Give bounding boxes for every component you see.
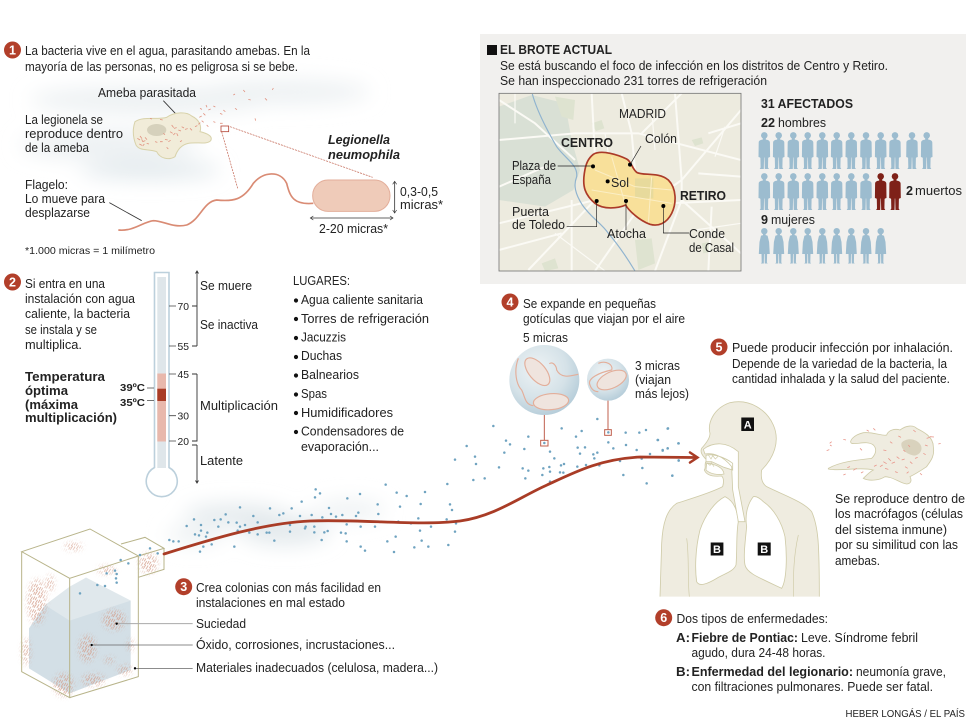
optimal temperature text (25, 370, 117, 425)
map labels: RETIRO (680, 189, 726, 203)
list: lugares: evaporación... (301, 440, 379, 454)
panel intro: Se han inspeccionado 231 torres de refrigeración (500, 74, 767, 88)
illustration: macrophage (827, 426, 941, 484)
label: flagelo: Flagelo: (25, 178, 68, 192)
label: 22 hombres: 22 (761, 116, 775, 130)
macrophage text: los macrófagos (células (835, 507, 963, 521)
label: la legionela se reproduce: de la ameba (25, 141, 89, 155)
step 4 text (523, 297, 685, 326)
step 4 text: Se expande en pequeñas (523, 297, 656, 311)
step 5: inhalation (660, 338, 965, 597)
pictogram: men row 2 (758, 173, 872, 210)
step 1 text (25, 44, 310, 74)
optimal range labels (120, 382, 145, 409)
badge 2: 2 (9, 276, 16, 290)
callouts: causes: Materiales inadecuados (celulosa, madera...) (196, 661, 438, 675)
callouts: causes: Suciedad (196, 617, 246, 631)
disease A (676, 631, 918, 660)
callouts: causes (196, 617, 438, 675)
badge 3 (175, 578, 192, 595)
thermometer (146, 271, 198, 497)
label: Legionella neumophila (328, 133, 400, 162)
haze: aerosol cloud (167, 501, 385, 545)
label: height: 0,3-0,5 (400, 185, 438, 199)
list: lugares: Agua caliente sanitaria (301, 293, 423, 307)
affected counts (758, 97, 962, 264)
label: 9 mujeres: mujeres (771, 213, 815, 227)
thermometer ranges (200, 279, 278, 468)
arrow: infection route (164, 452, 698, 554)
step 3 text: instalaciones en mal estado (196, 596, 345, 610)
thermometer ranges: Se inactiva (200, 318, 258, 332)
macrophage text: amebas. (835, 554, 880, 568)
badge 5 (710, 338, 728, 356)
map labels: de Toledo (512, 218, 565, 232)
label: length: 2-20 micras* (319, 222, 388, 236)
label: flagelo: Lo mueve para (25, 192, 105, 206)
disease B: con filtraciones pulmonares. Puede ser fatal. (692, 680, 933, 694)
step 2 text: instalación con agua (25, 292, 135, 306)
badge 1: 1 (9, 44, 16, 58)
badge 6 (655, 609, 672, 626)
illustration: tank (18, 528, 193, 700)
map labels (512, 107, 734, 255)
step 1 text: mayoría de las personas, no es peligrosa si se bebe. (25, 60, 298, 74)
label: flagelo (25, 178, 105, 220)
badge 3: 3 (180, 580, 187, 594)
step 1 text: La bacteria vive en el agua, parasitando amebas. En la (25, 44, 310, 58)
step 5 text: Depende de la variedad de la bacteria, la (732, 357, 947, 371)
list: lugares: Torres de refrigeración (301, 312, 429, 326)
macrophage text (835, 492, 965, 568)
thermometer ranges: Se muere (200, 279, 252, 293)
step 3 text: Crea colonias con más facilidad en (196, 581, 381, 595)
callouts: causes: Óxido, corrosiones, incrustaciones... (196, 637, 395, 652)
label: flagelo: desplazarse (25, 206, 90, 220)
list: lugares: LUGARES: (293, 274, 350, 288)
panel: el brote actual (480, 34, 966, 284)
step 5 text: cantidad inhalada y la salud del paciente. (732, 372, 950, 386)
label: height (400, 185, 443, 212)
label: la legionela se reproduce: La legionela se (25, 113, 103, 127)
panel intro: Se está buscando el foco de infección en los distritos de Centro y Retiro. (500, 59, 888, 73)
label: 3 micras: 3 micras (635, 359, 680, 373)
marker B right (758, 542, 771, 556)
map labels: Puerta (512, 205, 549, 219)
label: la legionela se reproduce (25, 113, 123, 155)
step 2 text: caliente, la bacteria (25, 307, 130, 321)
step 2 text: Si entra en una (25, 277, 105, 291)
thermometer scale numbers (178, 301, 189, 448)
label: 3 micras: (viajan (635, 373, 671, 387)
step 2 text: se instala y se (25, 323, 97, 337)
marker A (741, 418, 754, 432)
badge 6: 6 (660, 611, 667, 625)
haze: step 1 background (20, 80, 370, 178)
optimal temperature text: (máxima (25, 398, 79, 412)
pictogram: deaths (875, 173, 901, 210)
step 2 text (25, 277, 135, 352)
thermometer ranges: Latente (200, 454, 243, 468)
label: 2 muertos: muertos (915, 184, 962, 198)
disease A: A: (676, 631, 690, 645)
thermometer scale numbers: 70 (178, 301, 189, 313)
thermometer scale numbers: 55 (178, 341, 189, 353)
marker A: A (744, 420, 752, 432)
map labels: Plaza de (512, 159, 556, 173)
label: Legionella neumophila: neumophila (328, 148, 400, 162)
badge 5: 5 (716, 340, 723, 354)
pictogram: women (759, 228, 886, 264)
step 6 heading: Dos tipos de enfermedades: (676, 612, 828, 626)
optimal temperature text: Temperatura (25, 370, 106, 384)
list: lugares: Humidificadores (301, 406, 393, 420)
list: lugares: Condensadores de (301, 424, 404, 438)
label: height: micras* (400, 198, 443, 212)
label: 5 micras: 5 micras (523, 331, 568, 345)
disease A: Fiebre de Pontiac: (692, 631, 798, 645)
pictogram: men row 1 (758, 132, 932, 169)
step 2: temperature (4, 271, 429, 497)
step 6: diseases (655, 609, 946, 694)
step 4 text: gotículas que viajan por el aire (523, 312, 685, 326)
list: lugares: Balnearios (301, 368, 359, 382)
optimal temperature text: óptima (25, 384, 69, 398)
panel intro (500, 59, 888, 88)
optimal temperature text: multiplicación) (25, 411, 117, 425)
disease B: Enfermedad del legionario: (692, 665, 853, 679)
map labels: Colón (645, 132, 677, 146)
label: 2 muertos: 2 (906, 184, 913, 198)
aerosol particles (80, 419, 679, 593)
label: 3 micras: más lejos) (635, 387, 689, 401)
step 2 text: multiplica. (25, 338, 82, 352)
panel heading: EL BROTE ACTUAL (500, 43, 612, 57)
thermometer ranges: Multiplicación (200, 399, 278, 413)
step 4: droplets (502, 294, 689, 446)
badge 4: 4 (507, 296, 514, 310)
thermometer scale numbers: 30 (178, 410, 189, 422)
thermometer scale numbers: 20 (178, 436, 189, 448)
step 5 text (732, 341, 953, 386)
label: la legionela se reproduce: reproduce dentro (25, 127, 123, 141)
footnote: *1.000 micras = 1 milímetro (25, 245, 155, 257)
illustration: human respiratory system (660, 402, 819, 597)
badge 1 (4, 42, 21, 58)
step 3: cooling installation (18, 528, 438, 700)
label: 9 mujeres: 9 (761, 213, 768, 227)
map labels: Sol (611, 176, 629, 190)
label: ameba parasitada: Ameba parasitada (98, 86, 196, 100)
step 5 text: Puede producir infección por inhalación. (732, 341, 953, 355)
marker B left: B (713, 544, 721, 556)
list: lugares: Duchas (301, 349, 342, 363)
list: lugares (293, 274, 429, 454)
label: 3 micras (635, 359, 689, 401)
map labels: España (512, 173, 551, 187)
map labels: de Casal (689, 241, 734, 255)
marker B right: B (760, 544, 768, 556)
map labels: Conde (689, 227, 725, 241)
disease A: agudo, dura 24-48 horas. (692, 646, 826, 660)
disease A: Leve. Síndrome febril (801, 631, 918, 645)
macrophage text: Se reproduce dentro de (835, 492, 965, 506)
disease B: neumonía grave, (856, 665, 946, 679)
list: lugares: Jacuzzis (301, 330, 346, 344)
map labels: Atocha (607, 227, 646, 241)
droplets illustration (509, 345, 629, 446)
macrophage text: del sistema inmune) (835, 523, 947, 537)
step 1: bacteria in water (4, 42, 443, 257)
list: lugares: Spas (301, 387, 327, 401)
map of Madrid (499, 93, 741, 271)
disease B: B: (676, 665, 690, 679)
disease B (676, 665, 946, 694)
thermometer scale numbers: 45 (178, 369, 189, 381)
badge 4 (502, 294, 518, 310)
optimal range labels: 35ºC (120, 397, 145, 409)
heading: 31 afectados: 31 AFECTADOS (761, 97, 853, 111)
label: Legionella neumophila: Legionella (328, 133, 390, 147)
label: 22 hombres: hombres (778, 116, 826, 130)
optimal range labels: 39ºC (120, 382, 145, 394)
marker B left (711, 542, 723, 556)
macrophage text: por su similitud con las (835, 538, 958, 552)
map labels: CENTRO (561, 136, 613, 150)
map labels: MADRID (619, 107, 666, 121)
step 3 text (196, 581, 381, 610)
badge 2 (4, 274, 21, 290)
illustration: amoeba and bacterium (109, 88, 397, 230)
